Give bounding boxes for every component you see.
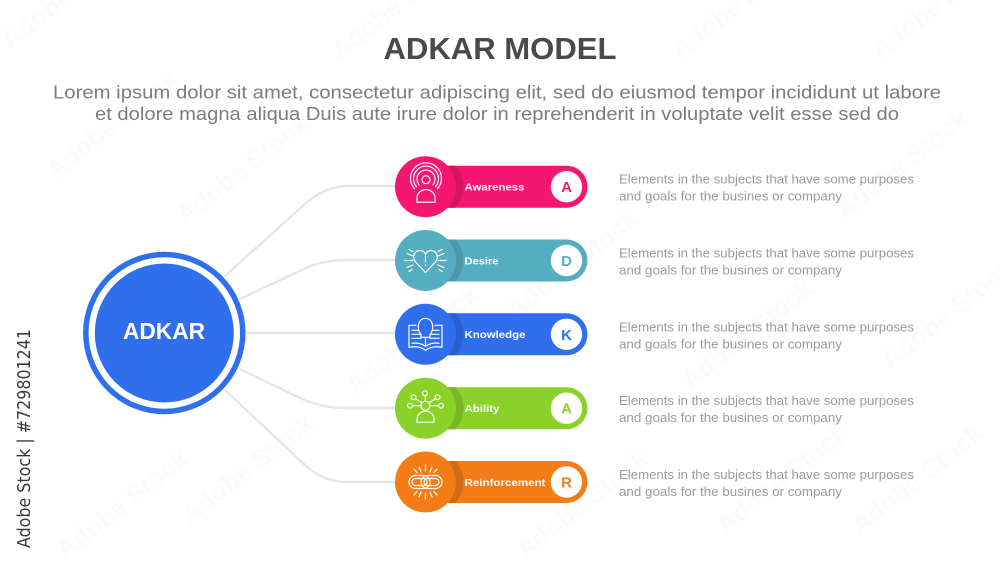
watermark pattern: Adobe Stock [845, 418, 989, 540]
watermark pattern: Adobe Stock [510, 443, 654, 563]
icon disc [395, 230, 456, 291]
shadow crescent [448, 313, 464, 356]
row: Reinforcement: and goals for the busines or company [619, 484, 842, 499]
title: ADKAR MODEL [384, 31, 616, 66]
subtitle: et dolore magna aliqua Duis aute irure dolor in reprehenderit in voluptate velit esse sed do [95, 103, 899, 124]
label: Reinforcement [464, 477, 546, 489]
letter badge [551, 245, 582, 276]
description: Elements in the subjects that have some purposes [619, 172, 915, 187]
description: Elements in the subjects that have some purposes [619, 319, 915, 334]
watermark pattern: Adobe Stock [710, 418, 854, 540]
connector lines [225, 186, 400, 482]
icon: broadcasting person [410, 163, 441, 202]
watermark pattern: Adobe Stock [500, 203, 644, 325]
central hub circle [86, 254, 243, 412]
description: Elements in the subjects that have some purposes [619, 393, 915, 408]
row: Reinforcement: R [561, 474, 572, 492]
central hub circle: ADKAR [123, 318, 205, 344]
watermark pattern: Adobe Stock [170, 108, 314, 230]
stock id side text: Adobe Stock | #729801241 [15, 329, 35, 548]
shadow crescent [448, 387, 464, 430]
subtitle: Lorem ipsum dolor sit amet, consectetur adipiscing elit, sed do eiusmod tempor incididunt ut labore [53, 82, 941, 102]
label: Awareness [464, 181, 525, 193]
row: Ability [395, 378, 915, 439]
icon disc [395, 452, 456, 512]
row: Knowledge [395, 304, 915, 365]
watermark pattern: Adobe Stock [830, 103, 974, 225]
description: Elements in the subjects that have some purposes [619, 246, 915, 260]
label: Knowledge [464, 329, 526, 341]
watermark pattern: Adobe Stock [40, 63, 184, 185]
icon disc [395, 378, 456, 439]
watermark pattern: Adobe Stock [340, 278, 484, 400]
row: Awareness: A [561, 179, 572, 196]
icon: person with network nodes [408, 391, 443, 422]
subtitle [53, 82, 941, 124]
watermark pattern: Adobe Stock [675, 273, 819, 395]
label: Ability [464, 403, 500, 415]
row: Reinforcement [395, 452, 915, 512]
row: Knowledge: and goals for the busines or company [619, 336, 842, 351]
letter badge [551, 466, 582, 498]
row: Ability: A [561, 401, 572, 418]
row: Desire: D [561, 253, 572, 270]
watermark pattern: Adobe Stock [175, 408, 319, 530]
watermark pattern: Adobe Stock [50, 443, 194, 563]
row: Knowledge: K [561, 327, 572, 344]
pill [426, 166, 588, 208]
icon: heart with rays [405, 250, 446, 272]
shadow crescent [448, 461, 464, 503]
pill [426, 387, 588, 429]
row: Awareness: and goals for the busines or company [619, 189, 842, 204]
pill [426, 461, 588, 503]
pill [426, 240, 588, 282]
description: Elements in the subjects that have some purposes [619, 467, 915, 482]
icon: book with bulb [409, 318, 442, 350]
row: Ability: and goals for the busines or company [619, 410, 842, 425]
letter badge [551, 319, 582, 350]
letter badge [551, 392, 582, 424]
row: Awareness [395, 156, 915, 217]
shadow crescent [448, 240, 464, 282]
label: Desire [464, 255, 499, 267]
icon disc [395, 156, 456, 217]
letter badge [551, 171, 582, 202]
row: Desire: and goals for the busines or company [619, 262, 842, 278]
icon: chain links [409, 465, 442, 499]
row: Desire [395, 230, 915, 291]
pill [426, 313, 588, 355]
icon disc [395, 304, 456, 365]
shadow crescent [448, 166, 464, 208]
